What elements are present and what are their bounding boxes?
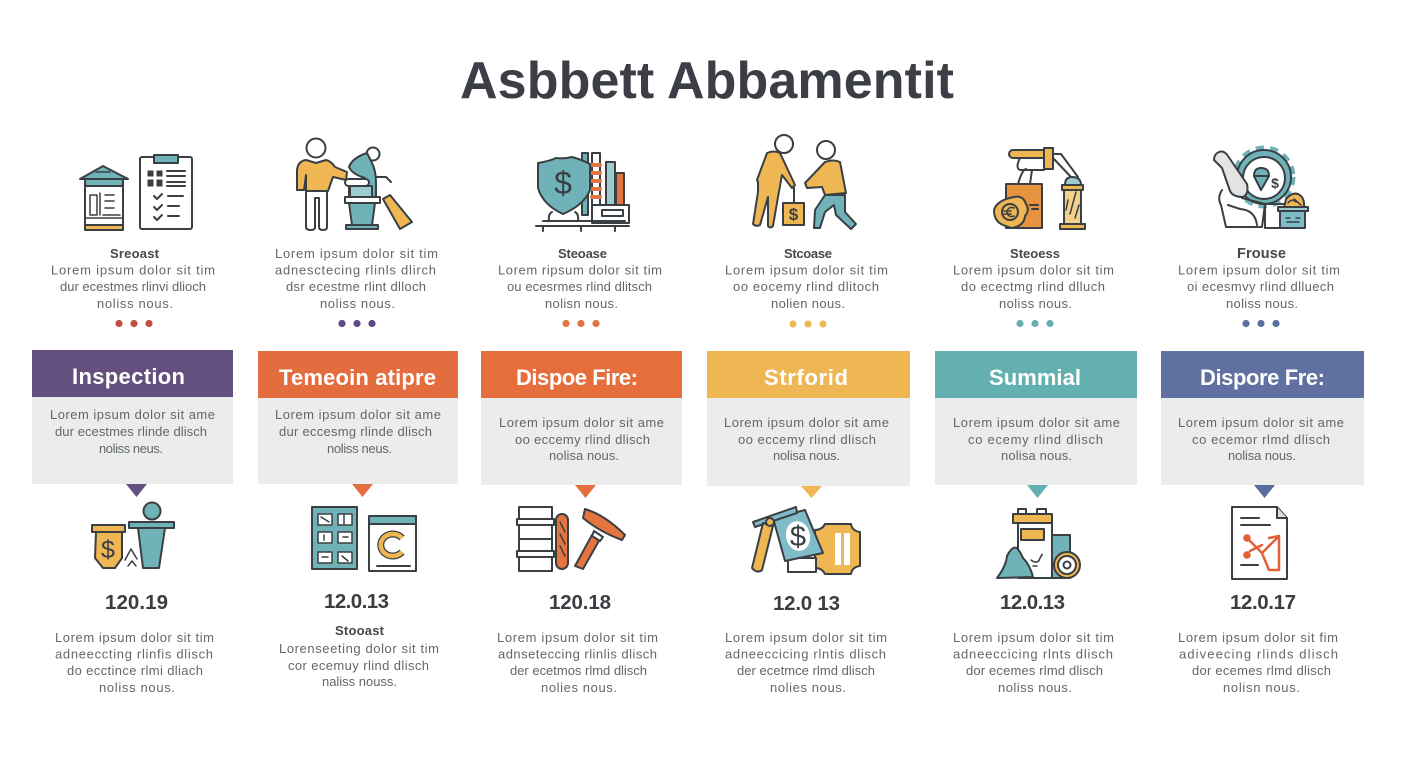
- header: Temeoin atipre: [258, 351, 458, 398]
- text block: Lorem ipsum dolor sit tim: [953, 630, 1114, 645]
- card text: [481, 398, 682, 485]
- text block: dsr ecestme rlint dlloch: [286, 279, 426, 294]
- panel: column 4: [707, 135, 910, 695]
- icon: gear, hand and bottle: $: [1271, 175, 1279, 191]
- heading: Steoase: [558, 246, 607, 261]
- date: 12.0.13: [1000, 591, 1065, 614]
- text block: noliss nous.: [99, 680, 175, 695]
- dots: [1242, 320, 1280, 327]
- heading: Sreoast: [110, 246, 160, 261]
- text block: Lorem ipsum dolor sit tim: [953, 262, 1114, 278]
- text block: do ecectmg rlind dlluch: [961, 279, 1105, 294]
- icon: panel and window: [312, 507, 416, 571]
- header: Inspection: Inspection: [72, 364, 185, 389]
- card text: nolisa nous.: [549, 448, 619, 463]
- text block: [725, 630, 887, 695]
- text block: [55, 630, 214, 695]
- text block: dor ecemes rlmd dlisch: [966, 663, 1103, 678]
- date: 12.0.13: [324, 590, 389, 613]
- icon: building, mound and wheel: [997, 509, 1080, 578]
- panel: column 1: [32, 155, 233, 695]
- dots: [789, 320, 827, 328]
- panel: column 5: [935, 148, 1137, 695]
- card text: oo eccemy rlind dlisch: [515, 432, 650, 447]
- text block: nolisn nous.: [1223, 680, 1300, 695]
- icon: gear, hand and bottle: [1214, 148, 1308, 228]
- card text: Lorem ipsum dolor sit ame: [50, 407, 215, 422]
- header: Summial: Summial: [989, 365, 1081, 390]
- icon: bin and podium: [92, 502, 174, 568]
- header: Dispoe Fire: Dispoe Fire:: [516, 365, 638, 390]
- icon: bin and podium: $: [101, 536, 115, 564]
- dots: [338, 320, 376, 327]
- date: 12.0 13: [773, 592, 840, 615]
- pointer: [352, 484, 373, 497]
- text block: adneeccting rlinfis dlisch: [55, 646, 213, 662]
- text block: [953, 630, 1114, 695]
- card text: Lorem ipsum dolor sit ame: [1178, 415, 1344, 430]
- text block: Lorem ipsum dolor sit tim: [51, 262, 215, 278]
- icon: drum, baguette and plunger: [517, 507, 625, 571]
- card text: [32, 397, 233, 484]
- card text: dur ecestmes rlinde dlisch: [55, 424, 207, 439]
- text block: [497, 630, 658, 695]
- icon: ticket, note and tool: [752, 507, 860, 574]
- text block: Lorem ripsum dolor sit tim: [498, 262, 662, 278]
- text block: adneeccicing rlnts dlisch: [953, 646, 1113, 662]
- dots: [1016, 320, 1054, 327]
- icon: two people and money bag: $: [789, 205, 799, 224]
- dots: [562, 320, 600, 327]
- text block: noliss nous.: [320, 296, 395, 311]
- text block: Lorem ipsum dolor sit tim: [275, 246, 438, 261]
- text block: nolies nous.: [770, 680, 846, 695]
- text block: dor ecemes rlmd dlisch: [1192, 663, 1331, 678]
- text block: [953, 262, 1114, 311]
- icon: document with graph: [1232, 507, 1287, 579]
- text block: Lorem ipsum dolor sit tim: [1178, 262, 1340, 278]
- text block: oi ecesmvy rlind dlluech: [1187, 279, 1334, 294]
- text block: ou ecesrmes rlind dlitsch: [507, 279, 652, 294]
- card text: [707, 398, 910, 486]
- text block: Lorenseeting dolor sit tim: [279, 641, 439, 656]
- text block: adnesctecing rlinls dlirch: [275, 262, 436, 278]
- card text: noliss neus.: [99, 441, 163, 456]
- text block: nolien nous.: [771, 296, 845, 311]
- dots: [115, 320, 153, 327]
- icon: shield and books: $: [554, 165, 572, 201]
- card text: nolisa nous.: [1228, 448, 1296, 463]
- card text: [258, 398, 458, 484]
- header: Dispore Fre: Dispore Fre:: [1200, 365, 1325, 390]
- text block: der ecetmce rlmd dlisch: [737, 663, 875, 678]
- text block: [498, 262, 662, 311]
- text block: [1178, 630, 1338, 695]
- date: 12.0.17: [1230, 591, 1296, 614]
- text block: noliss nous.: [97, 296, 173, 311]
- text block: adnseteccing rlinlis dlisch: [498, 646, 657, 662]
- pointer: [575, 485, 596, 498]
- header: Inspection: [32, 350, 233, 397]
- icon: two people and money bag: [753, 135, 856, 229]
- date: 120.19: [105, 591, 168, 614]
- text block: noliss nous.: [1226, 296, 1298, 311]
- card text: Lorem ipsum dolor sit ame: [953, 415, 1120, 430]
- text block: adneeccicing rlntis dlisch: [725, 646, 886, 662]
- pointer: [1027, 485, 1048, 498]
- icon: building and checklist: [80, 155, 192, 230]
- card text: nolisa nous.: [1001, 448, 1072, 463]
- card text: nolisa nous.: [773, 448, 840, 463]
- text block: do ecctince rlmi dliach: [67, 663, 203, 678]
- text block: Lorem ipsum dolor sit tim: [55, 630, 214, 645]
- text block: [1178, 262, 1340, 311]
- header: Temeoin atipre: Temeoin atipre: [279, 365, 436, 390]
- pointer: [126, 484, 147, 497]
- title: Asbbett Abbamentit: [460, 52, 954, 110]
- card text: dur eccesmg rlinde dlisch: [279, 424, 432, 439]
- card text: [935, 398, 1137, 485]
- text block: Lorem ipsum dolor sit tim: [497, 630, 658, 645]
- header: Strforid: [707, 351, 910, 398]
- header: Strforid: Strforid: [764, 365, 848, 390]
- header: Dispoe Fire: [481, 351, 682, 398]
- date: 120.18: [549, 591, 611, 614]
- text block: oo eocemy rlind dlitoch: [733, 279, 879, 294]
- text block: [51, 262, 215, 311]
- card text: co ecemor rlmd dlisch: [1192, 432, 1330, 447]
- text block: nolisn nous.: [545, 296, 618, 311]
- text block: naliss nouss.: [322, 674, 397, 689]
- text block: noliss nous.: [999, 296, 1072, 311]
- text block: Lorem ipsum dolor sit tim: [725, 262, 888, 278]
- text block: [275, 246, 438, 311]
- heading: Steoess: [1010, 246, 1060, 261]
- text block: der ecetmos rlmd dlisch: [510, 663, 647, 678]
- panel: column 6: [1161, 148, 1364, 695]
- text block: Lorem ipsum dolor sit fim: [1178, 630, 1338, 645]
- card text: co ecemy rlind dlisch: [968, 432, 1103, 447]
- pointer: [1254, 485, 1275, 498]
- text block: nolies nous.: [541, 680, 617, 695]
- text block: noliss nous.: [998, 680, 1072, 695]
- header: Dispore Fre: [1161, 351, 1364, 398]
- text block: [725, 262, 888, 311]
- pointer: [801, 486, 822, 498]
- heading: Stooast: [335, 623, 385, 638]
- text block: adiveecing rlinds dlisch: [1179, 646, 1338, 662]
- icon: ticket, note and tool: $: [790, 521, 806, 553]
- icon: shield and books: [536, 153, 629, 231]
- text block: dur ecestmes rlinvi dlioch: [60, 279, 206, 294]
- icon: two people with podium: [297, 138, 412, 230]
- card text: Lorem ipsum dolor sit ame: [499, 415, 664, 430]
- card text: Lorem ipsum dolor sit ame: [724, 415, 889, 430]
- text block: Lorem ipsum dolor sit tim: [725, 630, 887, 645]
- card text: [1161, 398, 1364, 485]
- panel: column 2: [258, 138, 458, 689]
- card text: Lorem ipsum dolor sit ame: [275, 407, 441, 422]
- header: Summial: [935, 351, 1137, 398]
- text block: cor ecemuy rlind dlisch: [288, 658, 429, 673]
- icon: robot arm, bag and coin: [994, 148, 1085, 229]
- heading: Frouse: [1237, 246, 1286, 262]
- panel: column 3: [481, 153, 682, 695]
- card text: oo eccemy rlind dlisch: [738, 432, 876, 447]
- text block: [279, 641, 439, 689]
- card text: noliss neus.: [327, 441, 392, 456]
- heading: Stcoase: [784, 246, 832, 261]
